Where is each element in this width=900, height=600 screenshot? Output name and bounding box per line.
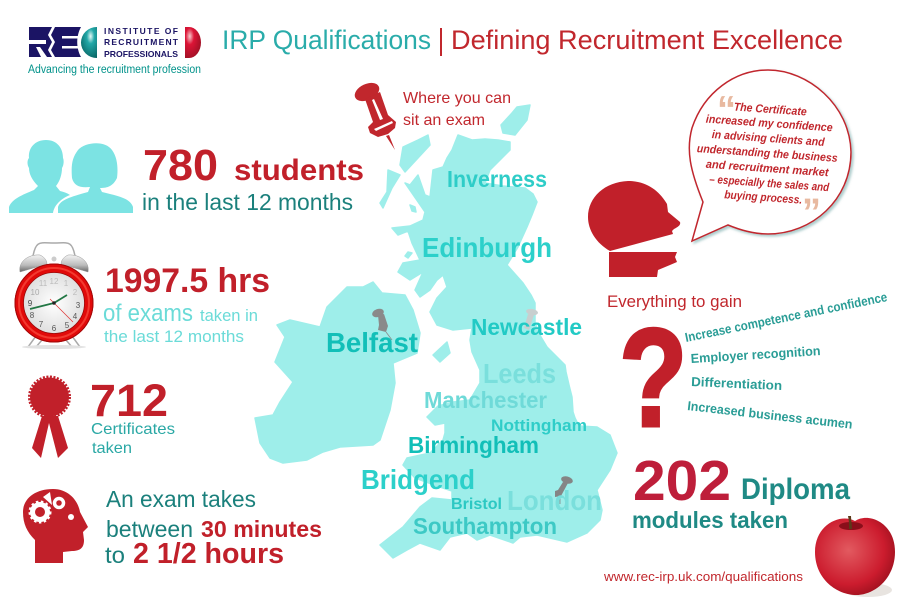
benefit: differentiation: Differentiation	[691, 374, 782, 393]
speech bubble quote	[689, 70, 851, 241]
quote text: buying process.	[724, 189, 803, 207]
text: of exams taken in: of exams	[103, 300, 193, 327]
logo mark	[29, 27, 201, 58]
logo name: RECRUITMENT	[104, 37, 179, 47]
text: an exam takes: An exam takes	[106, 486, 256, 512]
quote text: understanding the business	[696, 143, 838, 165]
benefit: recognition: Employer recognition	[690, 343, 821, 366]
heading: where you can sit an exam: Where you can	[403, 90, 511, 107]
logo tagline: Advancing the recruitment profession	[28, 64, 201, 76]
icon: speaking head	[588, 181, 680, 277]
panel: students: students	[234, 154, 364, 187]
text: to 2 1/2 hours: 2 1/2 hours	[133, 538, 284, 570]
label: Manchester: Manchester	[424, 387, 547, 413]
label: Southampton: Southampton	[413, 513, 557, 539]
pin: Belfast	[371, 307, 392, 340]
icon: alarm clock: 6	[52, 324, 57, 333]
label: Belfast: Belfast	[326, 327, 418, 358]
panel: exam hours	[14, 243, 270, 349]
quotation marks: “	[717, 89, 736, 131]
icon: alarm clock: 10	[31, 288, 40, 297]
benefit: business acumen: Increased business acumen	[687, 398, 853, 432]
label: Inverness: Inverness	[447, 166, 547, 192]
panel: exam length	[23, 486, 322, 570]
icon: apple	[815, 516, 895, 597]
heading: where you can sit an exam: sit an exam	[403, 112, 485, 129]
icon: alarm clock: 1	[64, 279, 69, 288]
icon: alarm clock: 7	[39, 320, 44, 329]
icon: alarm clock: 8	[30, 311, 35, 320]
quote text: and recruitment market	[705, 159, 830, 179]
stat: 712: 712	[90, 375, 168, 426]
logo	[28, 26, 201, 76]
title	[222, 25, 843, 56]
label: Bridgend: Bridgend	[361, 464, 475, 495]
text: between 30 minutes	[106, 516, 322, 542]
quotation marks	[717, 89, 821, 234]
icon: alarm clock: 5	[65, 321, 70, 330]
text: of exams taken in: taken in	[200, 307, 258, 325]
icon: head with gears	[23, 489, 88, 563]
quote text	[696, 101, 838, 207]
map of UK and Ireland	[255, 105, 617, 558]
logo name: PROFESSIONALS	[104, 49, 178, 59]
label: Birmingham: Birmingham	[408, 432, 539, 458]
label: Bristol: Bristol	[451, 496, 502, 513]
icon: question mark: ?	[619, 299, 687, 456]
text: between 30 minutes: between	[106, 516, 193, 542]
map: Uist	[380, 170, 400, 208]
stat: 1997.5 hrs: 1997.5 hrs	[105, 262, 270, 300]
panel: diploma modules	[632, 449, 850, 533]
map: Isle of Man	[433, 342, 450, 362]
text: certificates taken	[91, 421, 175, 457]
icon: alarm clock: 3	[76, 301, 81, 310]
logo name: INSTITUTE OF	[104, 26, 178, 36]
panel: certificates	[30, 375, 175, 458]
stat: Diploma: Diploma	[741, 473, 850, 506]
text: in the last 12 months: in the last 12 months	[142, 189, 353, 215]
icon: alarm clock: 9	[28, 299, 33, 308]
heading: everything to gain: Everything to gain	[607, 292, 742, 311]
pin: London	[555, 475, 574, 504]
panel: students	[9, 140, 364, 215]
text: certificates taken: Certificates	[91, 421, 175, 438]
text: certificates taken: taken	[92, 440, 132, 457]
map: Ireland	[255, 282, 420, 463]
heading: where you can sit an exam	[403, 90, 511, 129]
icon: alarm clock: 4	[73, 312, 78, 321]
label: Newcastle: Newcastle	[471, 314, 582, 340]
label: Edinburgh: Edinburgh	[422, 232, 552, 263]
logo name	[104, 26, 179, 59]
icon: people silhouettes	[9, 140, 133, 213]
quote text: – especially the sales and	[709, 174, 830, 194]
quote text: The Certificate	[733, 101, 808, 119]
label: London: London	[507, 485, 602, 516]
website url: www.rec-irp.uk.com/qualifications	[603, 569, 804, 584]
text: to 2 1/2 hours: to	[105, 542, 125, 568]
pin: Newcastle	[524, 308, 538, 330]
stat: 780 students: 780	[143, 141, 218, 190]
map: Lewis	[400, 135, 430, 172]
icon: alarm clock: 2	[73, 288, 78, 297]
label: Leeds: Leeds	[483, 358, 556, 389]
icon: rosette	[30, 377, 70, 458]
title: IRP Qualifications	[222, 25, 431, 55]
icon: alarm clock: 12	[50, 277, 59, 286]
map: small isles	[405, 205, 416, 258]
icon: red push pin	[352, 79, 396, 150]
text: the last 12 months: the last 12 months	[104, 328, 244, 346]
icon: alarm clock	[14, 243, 94, 349]
quote text: increased my confidence	[705, 114, 834, 134]
text: modules taken: modules taken	[632, 507, 788, 533]
benefits list	[684, 289, 888, 432]
quotation marks: ”	[802, 192, 821, 234]
map: Orkney	[501, 105, 530, 135]
stat: 202: 202	[633, 449, 731, 513]
text: between 30 minutes: 30 minutes	[201, 516, 322, 542]
city labels	[326, 166, 602, 539]
icon: alarm clock: 11	[39, 279, 48, 288]
text: of exams taken in	[103, 300, 258, 327]
label: Nottingham: Nottingham	[491, 416, 587, 435]
quote text: in advising clients and	[711, 129, 826, 149]
map: Great Britain	[380, 135, 617, 558]
title: Defining Recruitment Excellence	[451, 25, 843, 55]
